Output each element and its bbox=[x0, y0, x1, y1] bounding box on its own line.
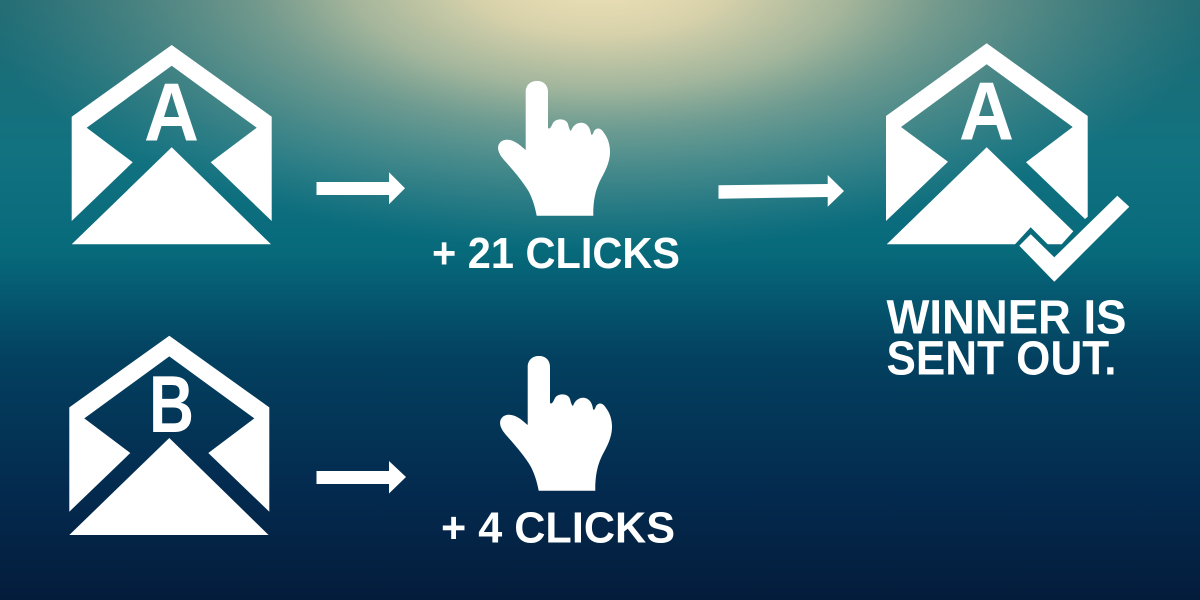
winner envelope with checkmark bbox=[886, 43, 1129, 282]
arrow: B to clicks bbox=[316, 461, 406, 494]
winner caption: SENT OUT. bbox=[886, 332, 1116, 385]
hand icon: A clicks bbox=[498, 81, 610, 216]
letter A: A bbox=[144, 66, 199, 158]
icon: checkmark bbox=[1019, 196, 1129, 282]
arrow: clicks to winner bbox=[718, 175, 844, 207]
letter A: A bbox=[959, 64, 1014, 158]
envelope B bbox=[69, 336, 269, 535]
letter B: B bbox=[149, 360, 194, 450]
winner caption bbox=[886, 291, 1126, 385]
hand icon: B clicks bbox=[500, 356, 612, 491]
label: +21 clicks: + 21 CLICKS bbox=[432, 229, 680, 278]
envelope A bbox=[72, 45, 272, 244]
label: +4 clicks: + 4 CLICKS bbox=[441, 504, 675, 553]
winner caption: WINNER IS bbox=[886, 291, 1126, 344]
arrow: A to clicks bbox=[316, 172, 405, 204]
